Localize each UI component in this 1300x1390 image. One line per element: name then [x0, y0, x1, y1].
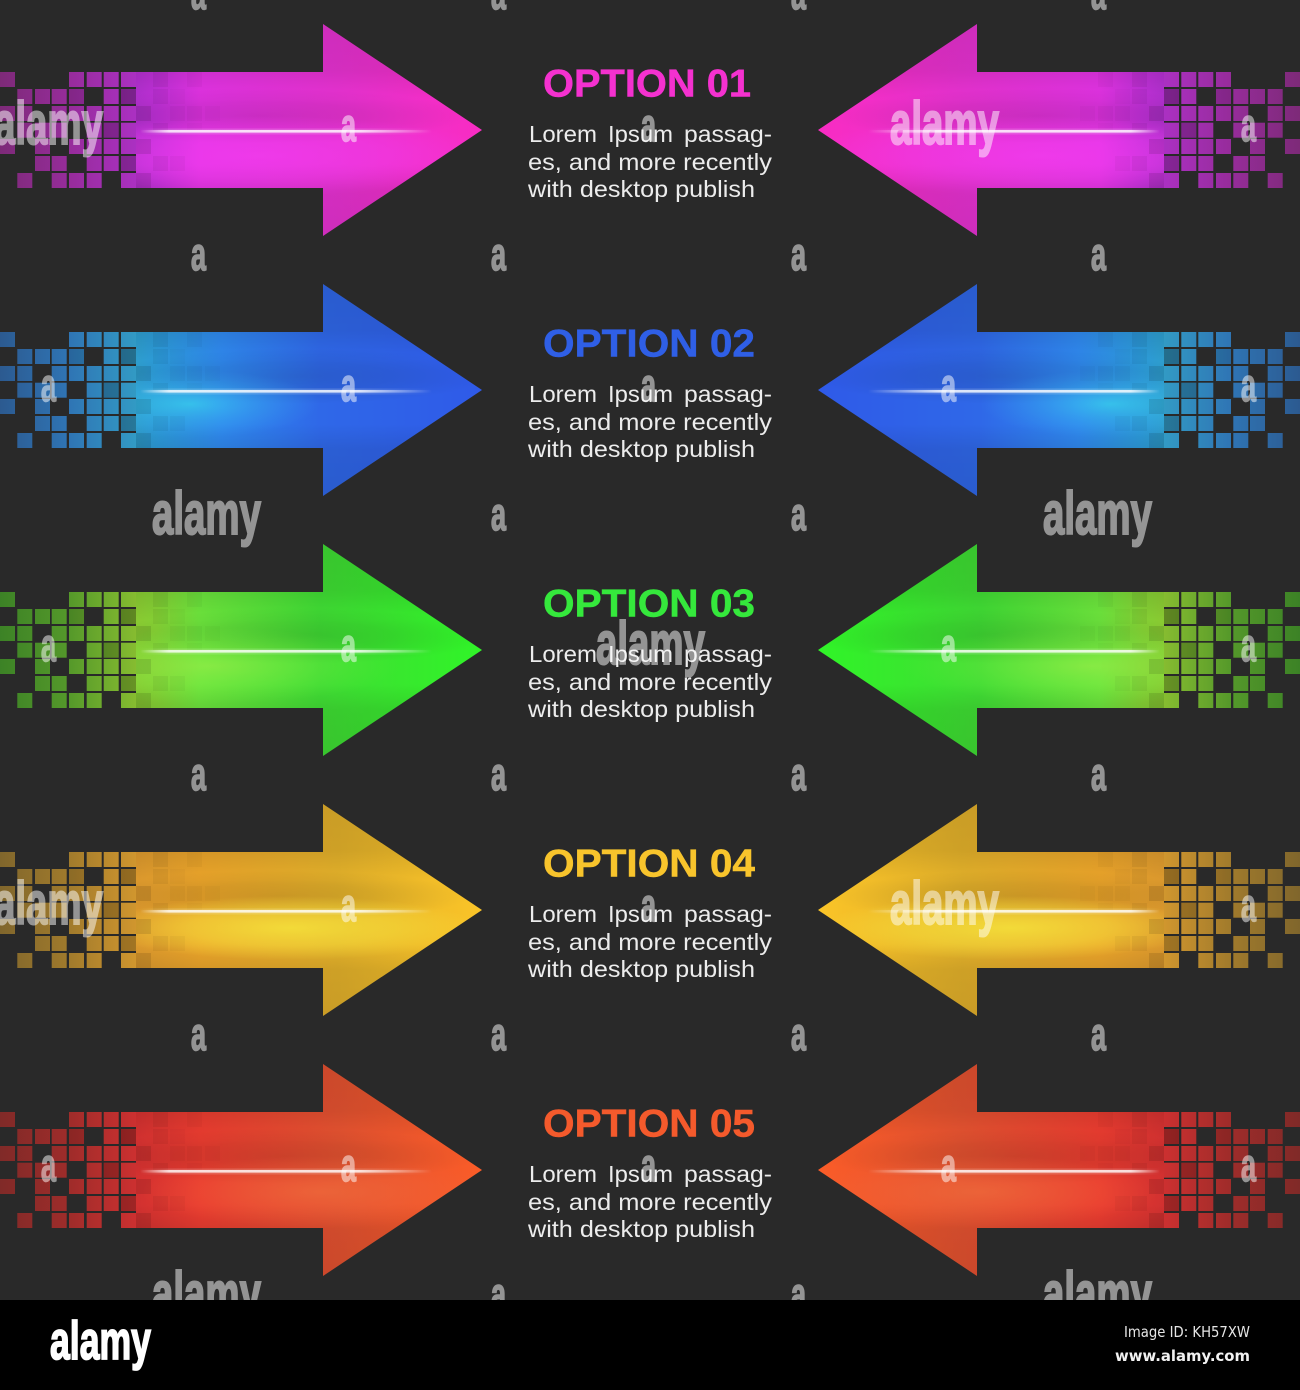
watermark: small letters: a: [41, 1139, 56, 1191]
footer bar: [0, 1300, 1300, 1390]
watermark: large logos: alamy: [1043, 480, 1152, 547]
watermark: small letters: a: [341, 359, 356, 411]
watermark: large logos: alamy: [152, 1260, 261, 1327]
option 03 text: Lorem: [529, 641, 597, 667]
option 03 text: with desktop publish: [527, 696, 755, 722]
watermark: small letters: a: [341, 879, 356, 931]
watermark: small letters: a: [791, 1268, 806, 1320]
right arrow 05: red: [800, 1064, 1300, 1276]
watermark: small letters: a: [491, 228, 506, 280]
option 04 text: es, and more recently: [528, 929, 773, 955]
watermark: small letters: a: [191, 1008, 206, 1060]
watermark: small letters: a: [41, 359, 56, 411]
watermark: small letters: a: [41, 619, 56, 671]
watermark: small letters: a: [1091, 748, 1106, 800]
option 04 text: Lorem: [529, 901, 597, 927]
right arrow 02: blue: [810, 284, 1300, 496]
option 01 text: Lorem: [529, 121, 597, 147]
watermark: small letters: a: [641, 1139, 656, 1191]
option 02 text: passag-: [684, 381, 772, 407]
watermark: small letters: a: [641, 879, 656, 931]
option 02 text: with desktop publish: [527, 436, 755, 462]
option 04 text: Ipsum: [608, 901, 673, 927]
watermark: small letters: a: [341, 619, 356, 671]
option 01 text: passag-: [684, 121, 772, 147]
image id: Image ID: KH57XW: [1124, 1323, 1250, 1341]
watermark: large logos: [0, 90, 1152, 1327]
option 02 text: OPTION 02: [543, 322, 755, 366]
option 02 text: [527, 322, 773, 462]
left arrow 05: red: [0, 1064, 500, 1276]
option 01 text: es, and more recently: [528, 149, 773, 175]
option 05 text: with desktop publish: [527, 1216, 755, 1242]
option 02 text: es, and more recently: [528, 409, 773, 435]
watermark: small letters: a: [791, 488, 806, 540]
option 04 text: [527, 842, 773, 982]
option 05 text: [527, 1102, 773, 1242]
watermark: small letters: a: [1091, 228, 1106, 280]
watermark: large logos: alamy: [152, 480, 261, 547]
watermark: small letters: a: [941, 1139, 956, 1191]
watermark: small letters: a: [1241, 879, 1256, 931]
option 02 text: Ipsum: [608, 381, 673, 407]
option 02 text: Lorem: [529, 381, 597, 407]
right arrow 03: green: [810, 544, 1300, 756]
option 03 text: Ipsum: [608, 641, 673, 667]
option 03 text: passag-: [684, 641, 772, 667]
watermark: small letters: a: [341, 99, 356, 151]
footer logo: alamy: [50, 1311, 151, 1371]
left arrow 03: green: [0, 544, 490, 756]
watermark: small letters: a: [1241, 359, 1256, 411]
option 05 text: es, and more recently: [528, 1189, 773, 1215]
option 04 text: with desktop publish: [527, 956, 755, 982]
watermark: large logos: alamy: [890, 870, 999, 937]
watermark: small letters: a: [1241, 1139, 1256, 1191]
watermark: small letters: a: [491, 748, 506, 800]
option 01 text: Ipsum: [608, 121, 673, 147]
left arrow 02: blue: [0, 284, 490, 496]
option 03 text: es, and more recently: [528, 669, 773, 695]
watermark: small letters: a: [1091, 1008, 1106, 1060]
option 01 text: [527, 62, 773, 202]
option 05 text: Ipsum: [608, 1161, 673, 1187]
watermark: small letters: a: [1241, 619, 1256, 671]
watermark: small letters: a: [191, 228, 206, 280]
watermark: small letters: a: [491, 488, 506, 540]
left arrow 04: yellow: [0, 804, 482, 1016]
left arrow 01: magenta: [0, 24, 500, 236]
option 05 text: passag-: [684, 1161, 772, 1187]
option 05 text: OPTION 05: [543, 1102, 755, 1146]
watermark: small letters: a: [791, 1008, 806, 1060]
watermark: small letters: a: [941, 359, 956, 411]
right arrow 04: yellow: [818, 804, 1300, 1016]
right arrow 01: magenta: [800, 24, 1300, 236]
option 04 text: passag-: [684, 901, 772, 927]
option 03 text: OPTION 03: [543, 582, 755, 626]
option 05 text: Lorem: [529, 1161, 597, 1187]
watermark: large logos: alamy: [596, 610, 705, 677]
watermark: small letters: a: [341, 1139, 356, 1191]
watermark: small letters: a: [491, 1008, 506, 1060]
watermark: large logos: alamy: [1043, 1260, 1152, 1327]
watermark: small letters: a: [641, 99, 656, 151]
watermark: large logos: alamy: [890, 90, 999, 157]
watermark: small letters: a: [791, 748, 806, 800]
option 01 text: with desktop publish: [527, 176, 755, 202]
watermark: small letters: a: [941, 619, 956, 671]
watermark: small letters: a: [191, 748, 206, 800]
watermark: small letters: a: [791, 228, 806, 280]
option 03 text: [527, 582, 773, 722]
website url: www.alamy.com: [1115, 1347, 1250, 1365]
watermark: small letters: a: [1241, 99, 1256, 151]
watermark: small letters: a: [491, 1268, 506, 1320]
option 01 text: OPTION 01: [543, 62, 751, 106]
option 04 text: OPTION 04: [543, 842, 755, 886]
watermark: small letters: a: [641, 359, 656, 411]
